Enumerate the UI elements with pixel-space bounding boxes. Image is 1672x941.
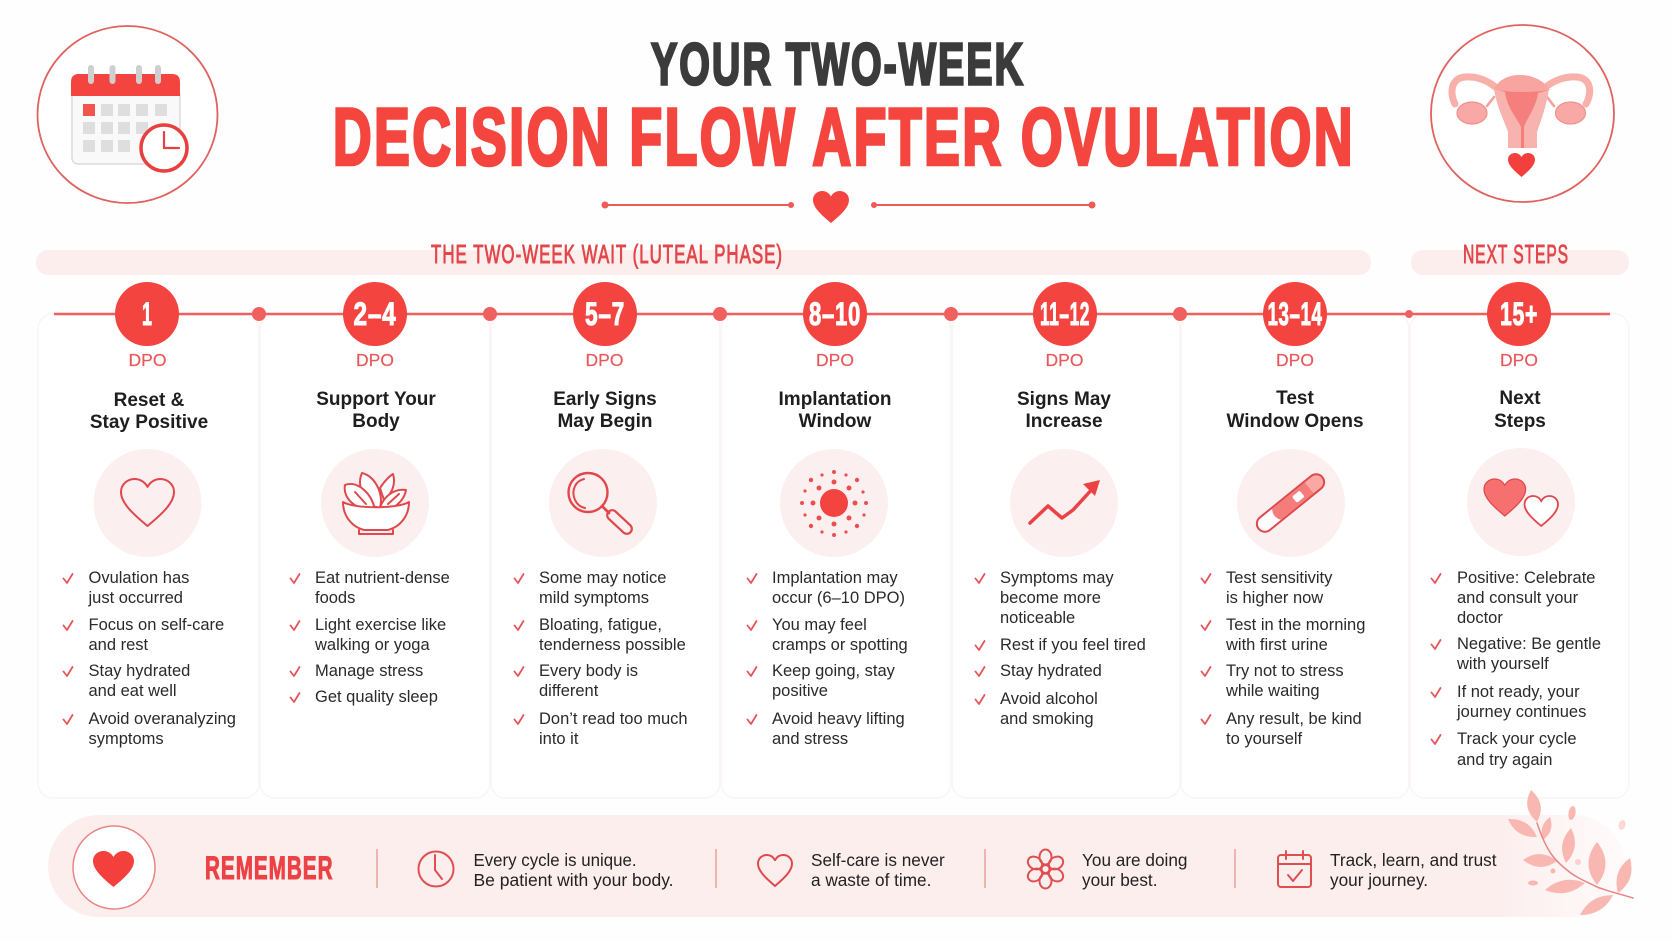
panel: 13-14 DPO: DPO	[1276, 350, 1314, 370]
item: track learn trust	[1278, 850, 1497, 890]
checklist: positive	[772, 682, 828, 700]
heading: reset and stay positive	[90, 390, 208, 433]
icon: salad bowl	[321, 449, 429, 557]
checklist: and try again	[1457, 751, 1552, 769]
checklist: journey continues	[1456, 703, 1586, 721]
heading: signs may increase: Increase	[1025, 411, 1103, 432]
icon: implantation dots	[780, 449, 888, 557]
checklist: Symptoms may	[1000, 569, 1114, 587]
checklist: and smoking	[1000, 710, 1094, 728]
panel: 1 DPO: DPO	[129, 350, 166, 370]
panel: 11-12 DPO	[952, 314, 1180, 798]
panel: 8-10 DPO: DPO	[816, 350, 854, 370]
heading: remember: REMEMBER	[205, 850, 334, 886]
panel: 1 DPO	[38, 314, 259, 798]
checklist: into it	[539, 730, 579, 748]
item: self-care	[758, 850, 945, 890]
checklist: Stay hydrated	[1000, 662, 1102, 680]
panel: 13-14 DPO	[1181, 314, 1409, 798]
heading: signs may increase	[1017, 389, 1111, 432]
checklist: Rest if you feel tired	[1000, 636, 1146, 654]
panel: 11-12 DPO: DPO	[1046, 350, 1083, 370]
checklist: Get quality sleep	[315, 688, 438, 706]
badge: 5-7: 5–7	[585, 296, 625, 332]
checklist: occur (6–10 DPO)	[772, 589, 905, 607]
icon: heart outline	[94, 449, 202, 557]
phase band: two-week wait: THE TWO-WEEK WAIT (LUTEAL PHASE)	[431, 239, 783, 269]
item: doing your best: your best.	[1082, 870, 1157, 890]
heading: reset and stay positive: Stay Positive	[90, 412, 208, 433]
checklist	[1432, 569, 1601, 769]
panel: 15+ DPO	[1410, 314, 1629, 798]
heading: early signs may begin: May Begin	[557, 411, 653, 432]
icon: pregnancy test	[1237, 449, 1345, 557]
checklist: Some may notice	[539, 569, 666, 587]
heading: next steps: Next	[1499, 388, 1541, 409]
checklist: symptoms	[88, 730, 164, 748]
badge: 15+: 15+	[1500, 296, 1538, 332]
heading: support your body	[316, 389, 436, 432]
title	[333, 30, 1355, 182]
checklist: You may feel	[772, 616, 867, 634]
heading: reset and stay positive: Reset &	[114, 390, 185, 411]
checklist: become more	[1000, 589, 1101, 607]
checklist	[290, 569, 450, 706]
item: track learn trust: Track, learn, and trust	[1330, 850, 1497, 870]
checklist: Bloating, fatigue,	[539, 616, 662, 634]
checklist: different	[539, 682, 599, 700]
heading: next steps: Steps	[1494, 411, 1546, 432]
icon: magnifier	[549, 449, 657, 557]
panel: 5-7 DPO	[491, 314, 720, 798]
heading: early signs may begin: Early Signs	[553, 389, 657, 410]
checklist	[748, 569, 908, 748]
checklist: cramps or spotting	[772, 636, 908, 654]
heading: support your body: Body	[352, 411, 400, 432]
heading: next steps	[1494, 388, 1546, 432]
checklist: tenderness possible	[539, 636, 686, 654]
heading: signs may increase: Signs May	[1017, 389, 1111, 410]
badge: 15+	[1487, 282, 1551, 346]
phase band: two-week wait	[36, 239, 1371, 275]
badge: 11-12: 11–12	[1040, 296, 1090, 332]
item: track learn trust: your journey.	[1330, 870, 1428, 890]
checklist: Focus on self-care	[88, 616, 224, 634]
checklist: while waiting	[1225, 682, 1320, 700]
checklist: Positive: Celebrate	[1457, 569, 1596, 587]
badge: 5-7	[573, 282, 637, 346]
checklist: and stress	[772, 730, 848, 748]
checklist: foods	[315, 589, 355, 607]
icon: two hearts	[1467, 448, 1575, 556]
panel: 2-4 DPO: DPO	[356, 350, 394, 370]
callout: remember bar	[48, 815, 1625, 917]
checklist: Track your cycle	[1457, 730, 1576, 748]
checklist: and eat well	[88, 682, 177, 700]
checklist: Avoid alcohol	[1000, 690, 1098, 708]
heading: test window opens	[1226, 388, 1364, 432]
phase band: next steps: NEXT STEPS	[1463, 239, 1569, 269]
item: every cycle is unique: Every cycle is unique.	[474, 850, 636, 870]
badge: 13-14: 13–14	[1268, 296, 1322, 332]
badge: 1	[115, 282, 179, 346]
icon: rising trend arrow	[1010, 449, 1118, 557]
checklist: walking or yoga	[314, 636, 430, 654]
checklist: Keep going, stay	[772, 662, 896, 680]
badge: 2-4: 2–4	[354, 296, 396, 332]
heading: early signs may begin	[553, 389, 657, 432]
badge: 8-10: 8–10	[809, 296, 861, 332]
checklist: Ovulation has	[88, 569, 189, 587]
item: self-care: Self-care is never	[811, 850, 945, 870]
checklist: Light exercise like	[315, 616, 446, 634]
checklist: If not ready, your	[1457, 683, 1580, 701]
title divider with heart	[602, 191, 1096, 223]
heading: test window opens: Test	[1276, 388, 1314, 409]
panel: 2-4 DPO	[260, 314, 490, 798]
item: every cycle is unique	[418, 850, 674, 890]
decoration: leaf branch	[1508, 790, 1633, 915]
heading: test window opens: Window Opens	[1226, 411, 1364, 432]
checklist: and rest	[88, 636, 149, 654]
checklist: with yourself	[1456, 655, 1549, 673]
title: YOUR TWO-WEEK	[651, 30, 1025, 98]
checklist: Test sensitivity	[1226, 569, 1333, 587]
checklist: just occurred	[88, 589, 183, 607]
checklist	[64, 569, 236, 748]
item: doing your best: You are doing	[1082, 850, 1187, 870]
checklist: Avoid overanalyzing	[88, 710, 236, 728]
checklist: Try not to stress	[1226, 662, 1344, 680]
checklist: Stay hydrated	[88, 662, 190, 680]
item: every cycle is unique: Be patient with your body.	[474, 870, 674, 890]
heading: support your body: Support Your	[316, 389, 436, 410]
checklist	[1202, 569, 1365, 748]
checklist: to yourself	[1226, 730, 1303, 748]
checklist: Any result, be kind	[1226, 710, 1362, 728]
badge: 1: 1	[142, 296, 152, 332]
checklist: is higher now	[1226, 589, 1323, 607]
timeline with day badges	[54, 282, 1610, 346]
icon: heart badge	[73, 826, 155, 909]
checklist	[514, 569, 688, 748]
checklist: Don’t read too much	[539, 710, 688, 728]
badge: 13-14	[1263, 282, 1327, 346]
checklist: with first urine	[1225, 636, 1328, 654]
checklist: Test in the morning	[1226, 616, 1365, 634]
panel: 15+ DPO: DPO	[1500, 350, 1538, 370]
icon: uterus	[1431, 25, 1614, 202]
item: doing your best	[1026, 850, 1187, 890]
heading: implantation window: Window	[799, 411, 872, 432]
panel: 5-7 DPO: DPO	[586, 350, 623, 370]
checklist: Eat nutrient-dense	[315, 569, 450, 587]
checklist: Negative: Be gentle	[1457, 635, 1601, 653]
phase band: next steps	[1411, 239, 1629, 275]
badge: 2-4	[343, 282, 407, 346]
badge: 11-12	[1033, 282, 1097, 346]
checklist: noticeable	[1000, 609, 1075, 627]
checklist	[976, 569, 1146, 728]
checklist: Every body is	[539, 662, 638, 680]
checklist: Manage stress	[315, 662, 423, 680]
item: self-care: a waste of time.	[811, 870, 931, 890]
heading: implantation window: Implantation	[779, 389, 891, 410]
checklist: Implantation may	[772, 569, 898, 587]
checklist: doctor	[1457, 609, 1503, 627]
badge: 8-10	[803, 282, 867, 346]
heading: implantation window	[779, 389, 891, 432]
checklist: mild symptoms	[539, 589, 649, 607]
checklist: and consult your	[1457, 589, 1579, 607]
panel: 8-10 DPO	[721, 314, 951, 798]
checklist: Avoid heavy lifting	[772, 710, 905, 728]
icon: calendar with clock	[38, 26, 218, 203]
